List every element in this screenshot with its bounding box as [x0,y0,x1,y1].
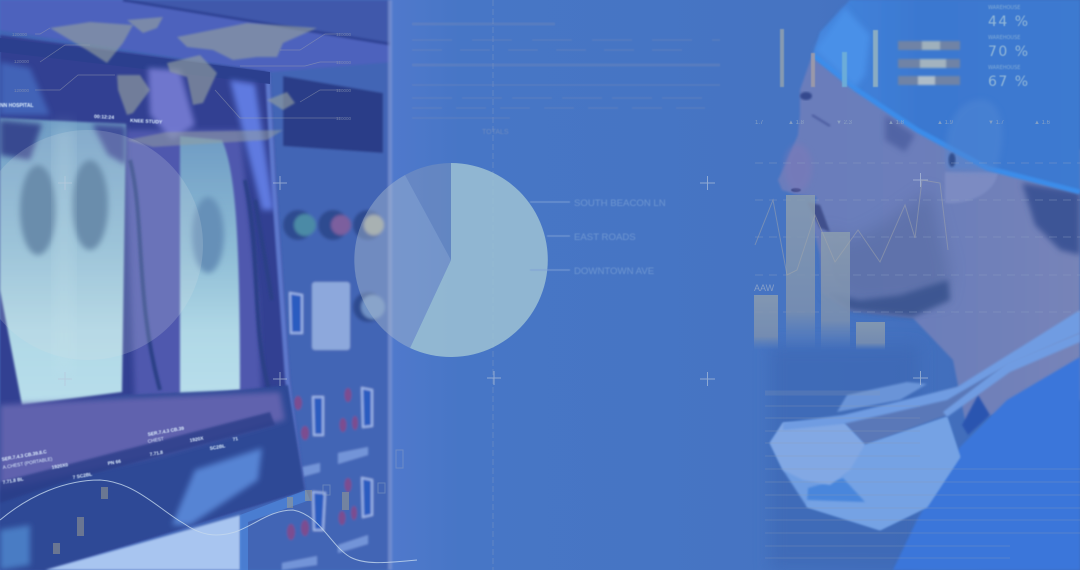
screen header tags: 00:12:24 [94,114,114,121]
scan cables [130,160,272,400]
percentage readouts: WAREHOUSE [988,35,1020,41]
trend markers: 1.7 [755,120,764,126]
sideburn [885,115,915,152]
nostril [791,188,801,192]
map callout labels: 120000 [336,32,352,37]
left x-ray [0,118,126,405]
top data table [412,24,720,118]
trend markers: ▲ 1.6 [1034,120,1051,126]
sine curve [0,480,417,563]
cap front fold [815,8,870,88]
trend markers: ▼ 1.7 [988,120,1005,126]
panel buttons [283,210,385,322]
neck and face [778,53,1080,420]
percentage readouts: 44 % [988,14,1030,30]
trend markers: ▲ 1.9 [937,120,954,126]
mask upper hump [837,382,927,412]
trend markers: ▲ 1.8 [788,120,805,126]
red indicator dots [287,388,358,540]
panel display [283,76,383,153]
map callout labels: 120000 [14,59,30,64]
man [770,0,1080,570]
percentage readouts: WAREHOUSE [988,65,1020,71]
wall shadow [770,345,920,570]
pie left slice [354,175,451,348]
hair [1022,183,1080,255]
percentage readouts [988,5,1030,90]
mouth shadow [807,202,830,232]
plus markers [58,173,928,386]
map callout labels: 120000 [12,32,28,37]
screen readouts: 71 [232,436,239,443]
right x-ray [180,136,240,398]
keypad [312,282,350,350]
screen readouts: 1920X [189,436,205,444]
percentage readouts: 67 % [988,74,1030,90]
bar chart: AAW [754,283,775,293]
map callouts [35,28,340,118]
candlestick marks [53,487,349,554]
map callout labels [12,32,352,121]
grid overlay [493,0,1080,570]
ear [945,172,998,203]
map callout labels: 120000 [14,88,30,93]
pie legend [530,198,666,277]
large translucent circle [0,130,203,360]
ear through cap [946,100,1002,172]
screen readouts [1,426,239,486]
progress bars [898,41,960,85]
percentage readouts: WAREHOUSE [988,5,1020,11]
percentage readouts: 70 % [988,44,1030,60]
eye [812,115,830,126]
trend markers: ▲ 1.8 [888,120,905,126]
trend markers [755,120,1051,126]
screen header tags: NN HOSPITAL [0,103,34,109]
screen readouts: 7.71.8 BL [2,476,24,486]
panel lower edge strip [240,490,310,570]
bottom right table [765,393,1080,558]
machine panel [0,0,392,570]
screen readouts: 7 SC2BL [72,472,93,481]
screen readouts: SER.7.4.3 CB.39.8.C [1,449,48,463]
cap rim [813,55,1080,192]
nose tint [784,144,812,192]
mask straps [783,310,1080,430]
map callout labels: 120000 [336,60,352,65]
pie legend: DOWNTOWN AVE [574,266,654,277]
pie main slice [410,163,548,357]
screen readouts: CHEST [147,436,164,445]
world map [50,17,317,147]
screen readouts: SC2BL [209,443,226,452]
pie top slice [405,163,451,260]
pie chart [354,163,548,357]
scrub shirt [893,357,1080,570]
bar chart [754,195,885,350]
x-ray screen [0,35,305,570]
mask base [770,417,960,530]
screen readouts: PN 66 [107,459,122,467]
screen purple background [125,130,262,400]
shirt collar shadow [962,395,990,435]
top table caption: TOTALS [482,129,509,136]
screen readouts: 1920X0 [51,462,69,471]
label plates [282,447,368,570]
strap gap [843,365,1010,445]
bottom-left light panel [45,515,240,570]
lower screen area [0,385,305,570]
pie legend: SOUTH BEACON LN [574,198,666,209]
map callout labels: 120000 [336,88,352,93]
screen readouts: A.CHEST (PORTABLE) [2,456,53,471]
sparkline bars [780,29,878,87]
screen header tags: KNEE STUDY [130,118,163,126]
screen readouts: 7.71.8 [149,450,164,458]
connectors [290,293,372,530]
screen header tags [0,103,163,126]
pie legend: EAST ROADS [574,232,636,243]
line chart [755,180,948,275]
mask left pad [770,422,865,485]
eyebrow [800,92,812,100]
mask inner fold [807,478,865,502]
outline candles [323,450,403,495]
stubble shading [825,190,950,305]
screen readouts: SER.7.4.3 CB.39 [147,426,185,438]
trend markers: ▼ 2.3 [836,120,853,126]
background wall [390,0,1080,570]
map callout labels: 120000 [336,116,352,121]
mask pleated body [807,417,960,530]
beard jaw [826,280,950,317]
surgical cap [813,0,1080,192]
